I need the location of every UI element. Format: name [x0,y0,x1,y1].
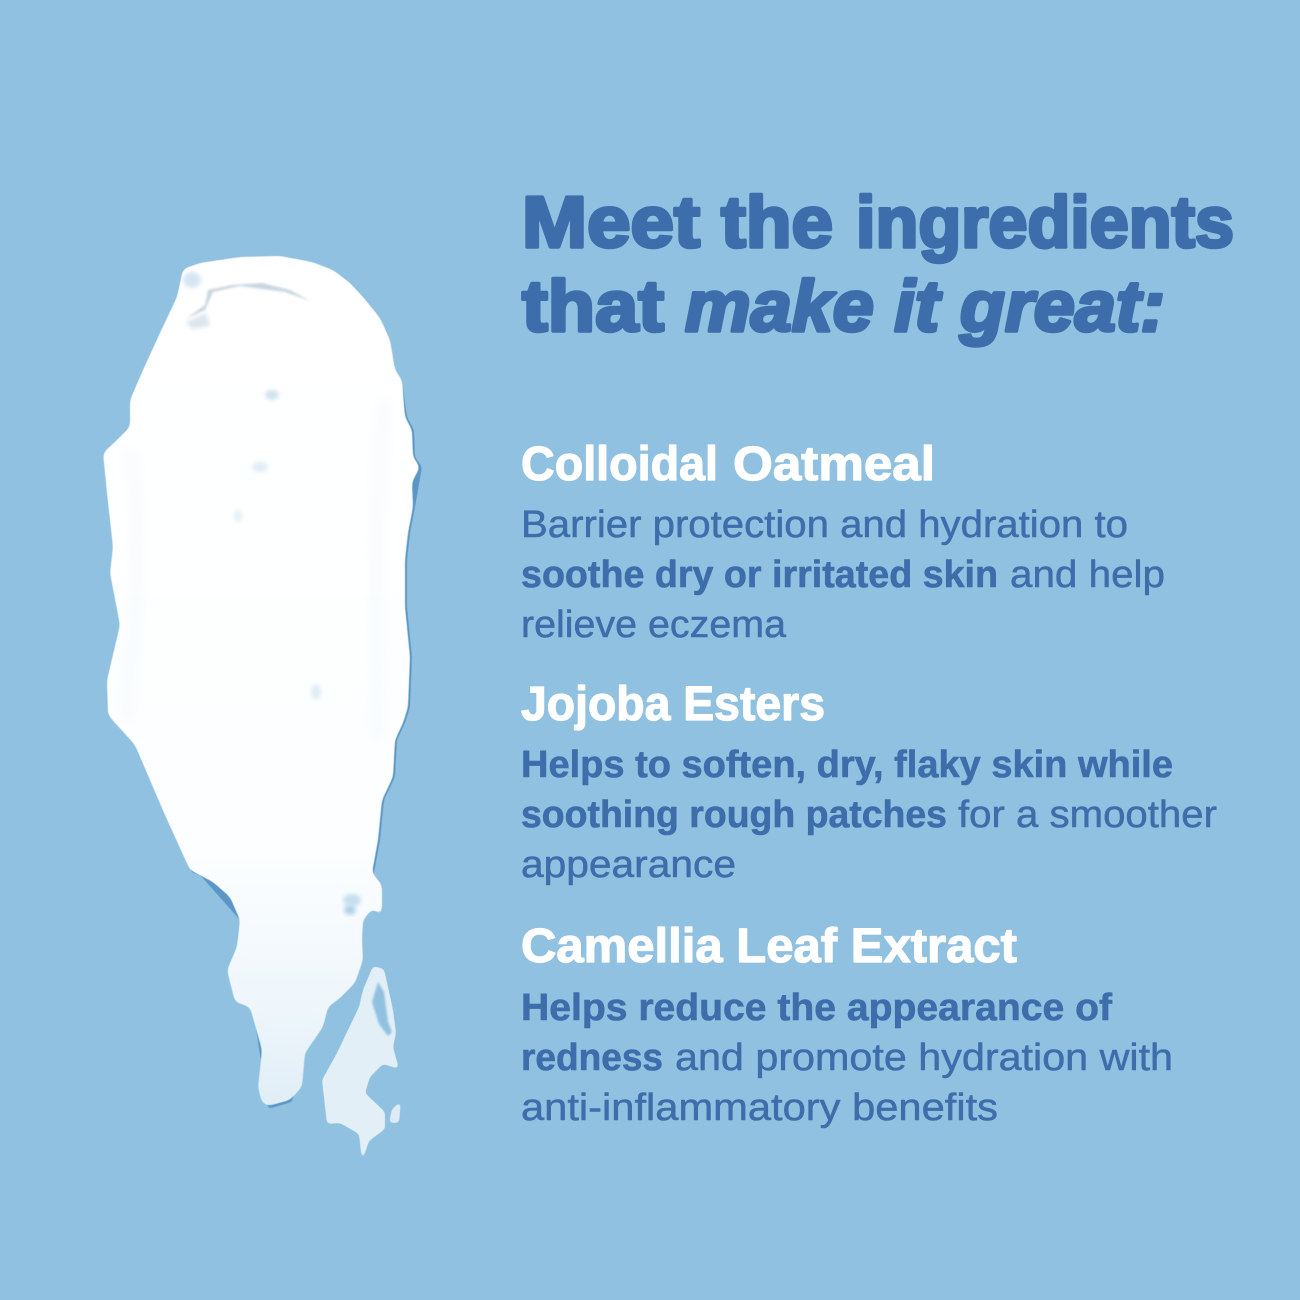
title: make it great: [685,267,1165,347]
heading [521,438,935,491]
title [522,183,1234,347]
description: anti-inflammatory benefits [521,1087,998,1129]
cream fragment [322,966,401,1162]
description: Helps to soften, dry, flaky skin while [521,744,1173,786]
description: Helps reduce the appearance of [521,987,1112,1029]
ingredient: jojoba esters [521,678,1217,886]
title: Meet [522,183,700,263]
description: Barrier protection and hydration to [521,504,1128,546]
heading: Colloidal [521,438,718,491]
ingredient: colloidal oatmeal [521,438,1165,646]
cream torn lower detail [343,894,361,915]
title: the [721,183,833,263]
description: and help [1010,554,1165,596]
description [521,987,1173,1129]
cream rim highlights [125,400,385,740]
title: ingredients [856,183,1234,263]
heading: Oatmeal [733,438,935,491]
cream surface flecks [183,272,321,700]
description: soothing rough patches [521,794,947,836]
ingredient: camellia leaf extract [521,920,1173,1129]
heading: Camellia Leaf Extract [521,920,1017,973]
description [521,504,1165,646]
description: and promote hydration with [675,1037,1173,1079]
description: relieve eczema [521,604,787,646]
description: redness [521,1037,663,1079]
description: for a smoother [958,794,1217,836]
description [521,744,1217,886]
cream fold shadow [186,283,310,329]
cream swatch [103,256,422,1162]
description: appearance [521,844,736,886]
description: soothe dry or irritated skin [521,554,998,596]
heading: Jojoba Esters [521,678,825,731]
title: that [522,267,664,347]
